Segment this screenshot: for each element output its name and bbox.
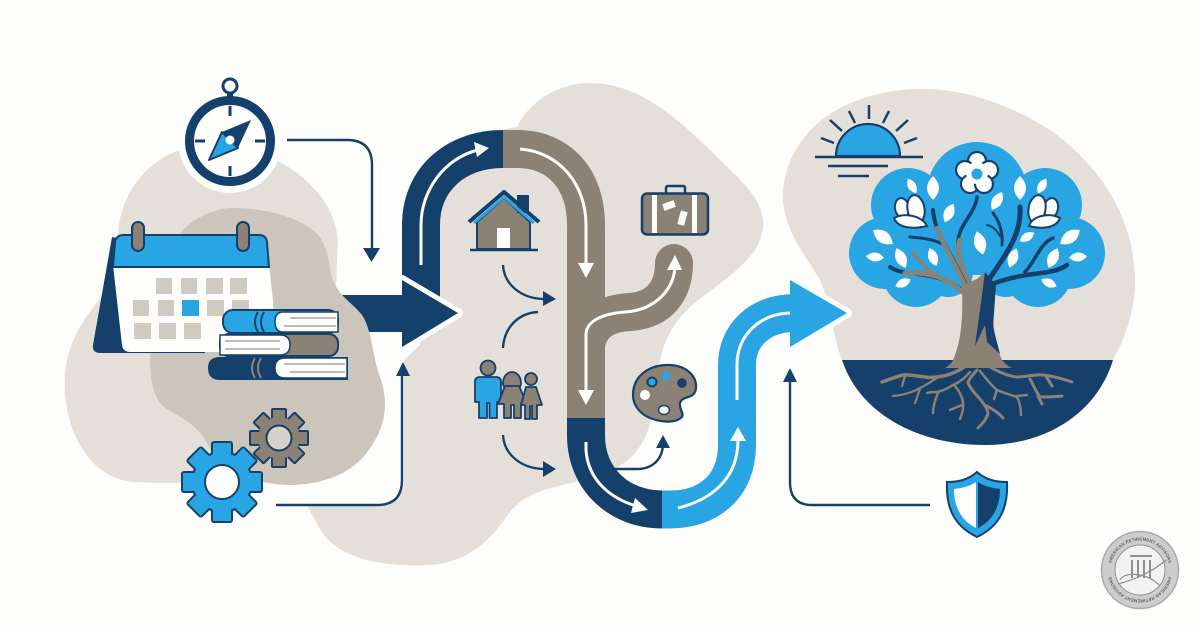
icon: grey gear (249, 408, 309, 468)
arrow: house to path (503, 265, 556, 306)
logo seal (1100, 530, 1180, 610)
background blob: right (783, 89, 1135, 360)
arrow: gears to path (276, 362, 410, 505)
icon: palette (633, 365, 696, 422)
logo seal: AMERICAN RETIREMENT ADVISORS (1108, 538, 1172, 564)
background blob: left light (65, 145, 338, 483)
logo seal: AMERICAN RETIREMENT ADVISORS (1108, 576, 1172, 602)
icon: compass (178, 79, 282, 193)
icon: suitcase (642, 186, 708, 234)
journey path: brown branch (586, 263, 674, 345)
background blob: centre (307, 83, 763, 565)
navy ground (842, 360, 1113, 445)
icon: family (475, 360, 542, 419)
icon: calendar (93, 222, 273, 353)
flower: left tulip (893, 194, 927, 228)
icon: sunrise (815, 105, 923, 176)
arrow: shield to tree (783, 368, 930, 505)
icon: shield (947, 472, 1007, 537)
tree roots (882, 365, 1072, 428)
flower: top (956, 152, 998, 193)
arrow: compass to path (287, 140, 380, 262)
journey path: blue rise with arrow (662, 280, 847, 510)
tree canopy (849, 142, 1105, 307)
tree leaves (866, 176, 1087, 290)
journey path: navy arch (421, 142, 503, 300)
arc: family to house (503, 312, 538, 348)
background blob: left dark (150, 208, 385, 485)
navy entry arrow (335, 280, 458, 347)
icon: house (469, 192, 539, 250)
journey path: navy bend (586, 418, 662, 513)
icon: blue gear (181, 441, 263, 523)
icon: stack of books (208, 310, 348, 380)
arrow: family to path (503, 435, 556, 477)
journey path: brown trunk (503, 149, 682, 418)
flower: right tulip (1026, 194, 1060, 228)
tree branches (890, 197, 1067, 294)
tree trunk (945, 272, 1012, 368)
arrow: path to palette (615, 435, 670, 469)
